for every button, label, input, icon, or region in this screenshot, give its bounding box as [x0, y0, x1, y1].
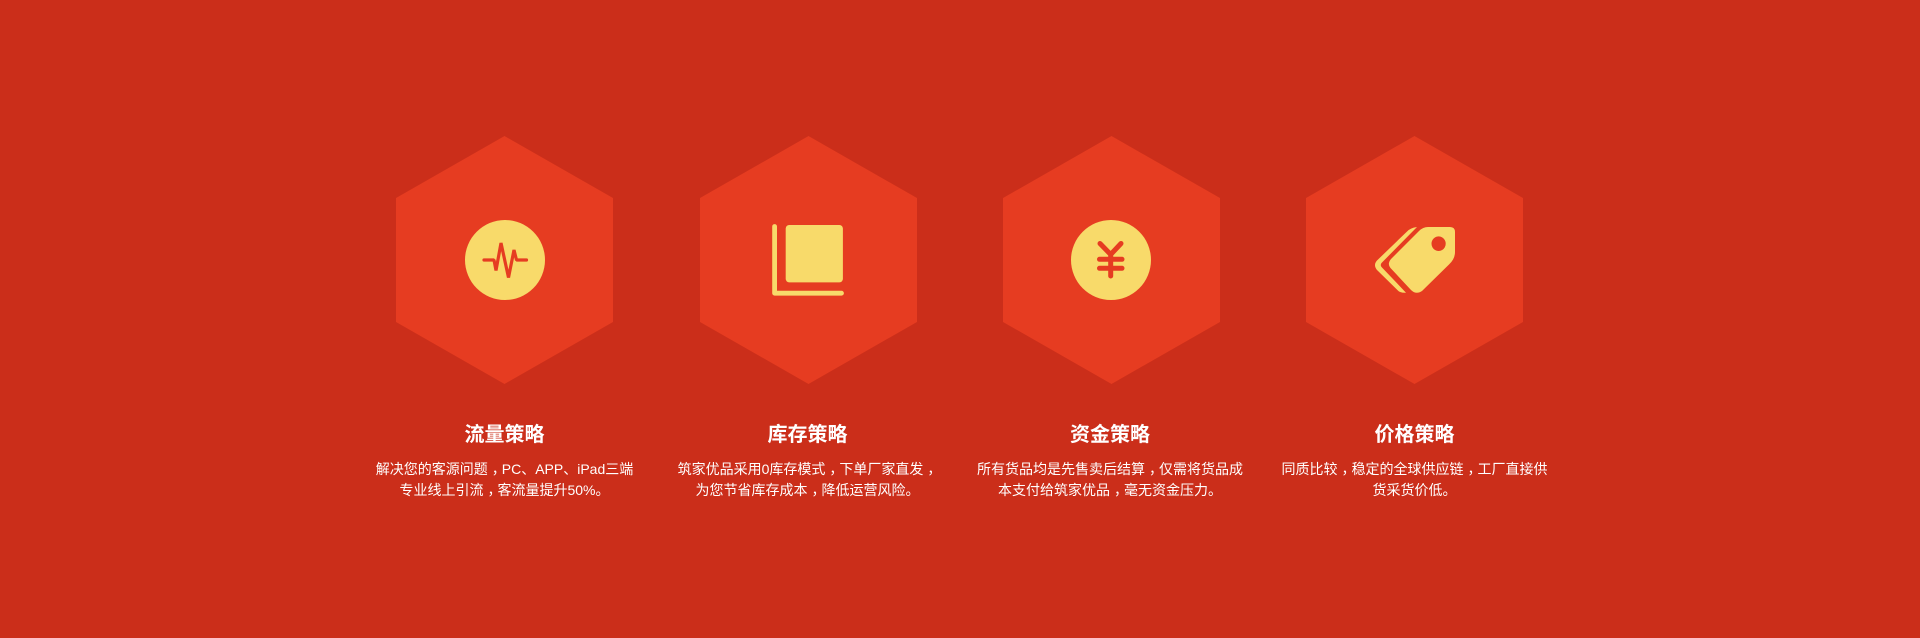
- text: traffic strategy: 流量策略: [464, 424, 544, 446]
- panel: funds hexagon: [1003, 136, 1220, 384]
- text: price strategy: [1282, 424, 1548, 498]
- panel: traffic hexagon: [396, 136, 613, 384]
- text: inventory strategy: 为您节省库存成本 ，降低运营风险。: [696, 482, 920, 498]
- text: traffic strategy: [376, 424, 633, 498]
- panel: inventory hexagon: [700, 136, 917, 384]
- text: price strategy: 同质比较 ，稳定的全球供应链 ，工厂直接供: [1282, 461, 1548, 477]
- text: inventory strategy: [678, 424, 941, 498]
- text: price strategy: 价格策略: [1374, 424, 1454, 446]
- text: inventory strategy: 筑家优品采用0库存模式 ，下单厂家直发 ，: [678, 461, 941, 477]
- text: traffic strategy: 专业线上引流 ，客流量提升50%。: [399, 482, 610, 498]
- icon: pulse circle: [465, 220, 545, 300]
- icon: stacked square: [775, 225, 843, 293]
- text: traffic strategy: 解决您的客源问题 ，PC、APP、iPad三端: [376, 461, 633, 477]
- icon: yen circle: [1071, 220, 1151, 300]
- text: funds strategy: 本支付给筑家优品 ，毫无资金压力。: [998, 482, 1222, 498]
- text: inventory strategy: 库存策略: [768, 424, 848, 446]
- icon: price tags: [1375, 227, 1455, 293]
- text: funds strategy: 资金策略: [1070, 424, 1150, 446]
- text: price strategy: 货采货价低。: [1372, 482, 1456, 498]
- text: funds strategy: 所有货品均是先售卖后结算 ，仅需将货品成: [977, 461, 1243, 477]
- text: funds strategy: [977, 424, 1243, 498]
- panel: price hexagon: [1306, 136, 1523, 384]
